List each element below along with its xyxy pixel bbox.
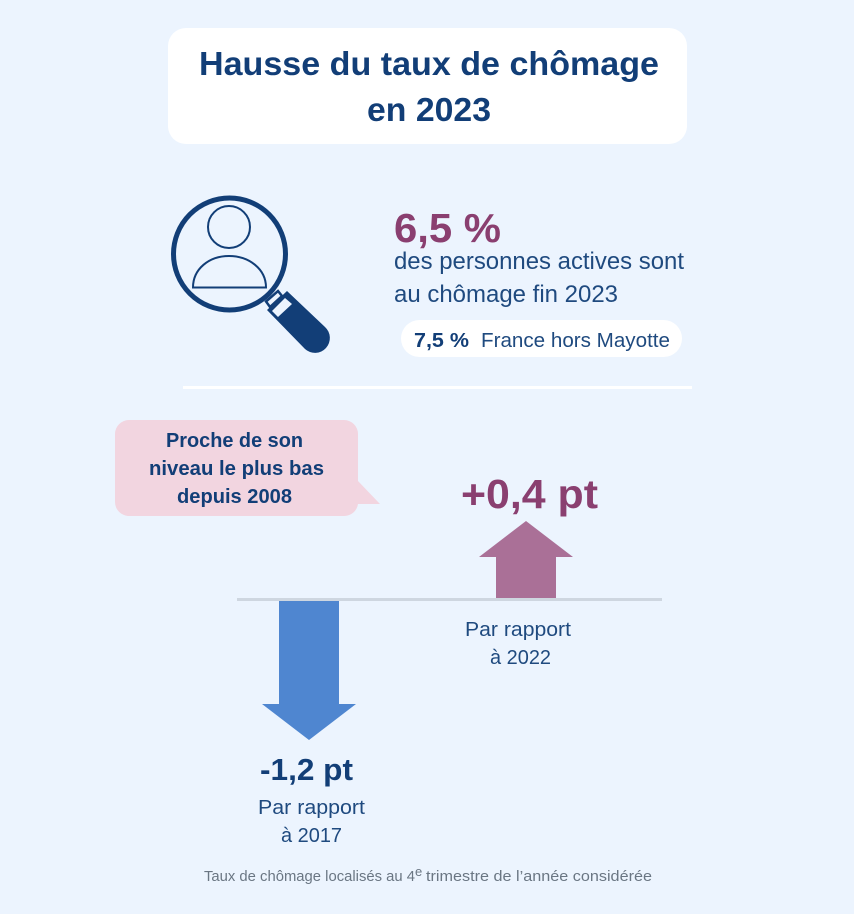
text block: description: au chômage fin 2023: [394, 281, 618, 308]
callout: speech bubble: depuis 2008: [177, 486, 292, 508]
pill: France hors Mayotte: France hors Mayotte: [481, 330, 670, 352]
footnote: [204, 864, 652, 885]
callout: speech bubble: [115, 420, 380, 516]
arrow: up: [479, 521, 573, 598]
label: par rapport à 2017: Par rapport: [258, 797, 365, 819]
title: Hausse du taux de chômage: [199, 45, 659, 82]
callout: speech bubble: Proche de son: [166, 430, 303, 452]
text block: description: des personnes actives sont: [394, 248, 684, 275]
text block: description: [394, 248, 684, 308]
key figure: 6,5 %: 6,5 %: [394, 205, 501, 251]
pill: France hors Mayotte: 7,5 %: [414, 330, 469, 352]
arrow: down: [262, 601, 356, 740]
footnote: Taux de chômage localisés au 4: [204, 868, 415, 885]
label: par rapport à 2022: [465, 619, 571, 669]
footnote: e: [415, 864, 422, 879]
key figure: -1,2 pt: -1,2 pt: [260, 752, 353, 787]
label: par rapport à 2022: à 2022: [490, 647, 551, 669]
label: par rapport à 2017: à 2017: [281, 825, 342, 847]
key figure: +0,4 pt: +0,4 pt: [461, 471, 598, 517]
pill: France hors Mayotte: [401, 320, 682, 357]
icon: magnifying glass with person: [174, 198, 330, 353]
label: par rapport à 2022: Par rapport: [465, 619, 571, 641]
title: [168, 28, 687, 144]
footnote: trimestre de l’année considérée: [426, 868, 652, 885]
label: par rapport à 2017: [258, 797, 365, 847]
callout: speech bubble: niveau le plus bas: [149, 458, 324, 480]
title: en 2023: [367, 91, 491, 128]
